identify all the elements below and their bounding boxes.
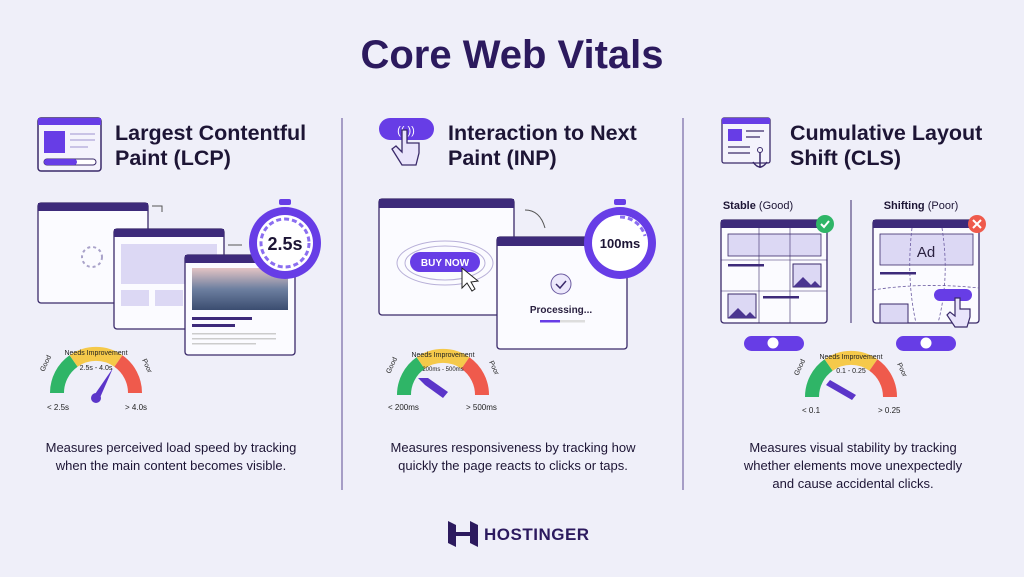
illustration: LCP loading windows bbox=[38, 203, 295, 355]
gauge: INP: Good bbox=[385, 356, 399, 375]
icon: stopwatch 100ms bbox=[584, 199, 656, 279]
title: Core Web Vitals bbox=[360, 33, 664, 77]
gauge: INP: 200ms - 500ms bbox=[422, 367, 464, 373]
gauge: INP: < 200ms bbox=[388, 403, 419, 412]
gauge: CLS bbox=[793, 354, 908, 415]
text: LCP description: when the main content becomes visible. bbox=[55, 458, 286, 473]
gauge: CLS: 0.1 - 0.25 bbox=[836, 368, 866, 375]
heading: LCP: Largest Contentful bbox=[115, 121, 306, 145]
panel: CLS bbox=[721, 118, 986, 491]
text: CLS description: whether elements move unexpectedly bbox=[743, 458, 963, 473]
illustration: INP windows bbox=[379, 199, 627, 349]
gauge: LCP: > 4.0s bbox=[125, 403, 147, 412]
illustration: INP windows: BUY NOW bbox=[421, 258, 470, 269]
gauge: INP: Needs Improvement bbox=[411, 352, 475, 359]
gauge: INP bbox=[385, 352, 500, 412]
icon: layout anchor bbox=[722, 118, 770, 168]
illustration: INP windows: Processing... bbox=[530, 305, 592, 316]
logo: Hostinger bbox=[448, 521, 590, 547]
gauge: INP: > 500ms bbox=[466, 403, 497, 412]
icon: LCP page bbox=[38, 118, 101, 171]
gauge: LCP: Needs Improvement bbox=[64, 350, 128, 357]
heading: CLS: Cumulative Layout bbox=[790, 121, 982, 145]
text: CLS description: and cause accidental clicks. bbox=[772, 476, 934, 491]
gauge: INP: Poor bbox=[487, 360, 500, 377]
illustration: shifting layout: Shifting (Poor) bbox=[884, 200, 958, 212]
gauge: LCP: Poor bbox=[140, 358, 153, 375]
heading: CLS: Shift (CLS) bbox=[790, 146, 901, 170]
illustration: stable layout: Stable (Good) bbox=[723, 200, 793, 212]
gauge: CLS: < 0.1 bbox=[802, 406, 821, 415]
panel: LCP bbox=[38, 118, 321, 473]
icon: tap: (( )) bbox=[397, 125, 415, 137]
heading: INP: Interaction to Next bbox=[448, 121, 637, 145]
gauge: LCP: < 2.5s bbox=[47, 403, 69, 412]
icon: tap bbox=[379, 118, 434, 165]
gauge: CLS: Good bbox=[793, 358, 807, 377]
text: INP description: Measures responsiveness by tracking how bbox=[391, 440, 635, 455]
icon: stopwatch 100ms: 100ms bbox=[600, 236, 640, 251]
gauge: LCP bbox=[39, 350, 153, 412]
panel: INP bbox=[379, 118, 656, 473]
text: INP description: quickly the page reacts to clicks or taps. bbox=[398, 458, 628, 473]
text: CLS description: Measures visual stability by tracking bbox=[749, 440, 957, 455]
illustration: shifting layout: Ad bbox=[917, 244, 935, 261]
illustration: stable layout bbox=[721, 200, 834, 351]
gauge: LCP: 2.5s - 4.0s bbox=[80, 365, 113, 372]
gauge: CLS: > 0.25 bbox=[878, 406, 901, 415]
illustration: shifting layout bbox=[851, 200, 986, 351]
text: LCP description: Measures perceived load speed by tracking bbox=[46, 440, 296, 455]
gauge: CLS: Needs Improvement bbox=[819, 354, 883, 361]
icon: stopwatch 2.5s bbox=[249, 199, 321, 279]
logo: Hostinger: HOSTINGER bbox=[484, 525, 590, 544]
heading: INP: Paint (INP) bbox=[448, 146, 557, 170]
gauge: CLS: Poor bbox=[895, 362, 908, 379]
icon: stopwatch 2.5s: 2.5s bbox=[267, 234, 303, 254]
heading: LCP: Paint (LCP) bbox=[115, 146, 231, 170]
gauge: LCP: Good bbox=[39, 354, 53, 373]
